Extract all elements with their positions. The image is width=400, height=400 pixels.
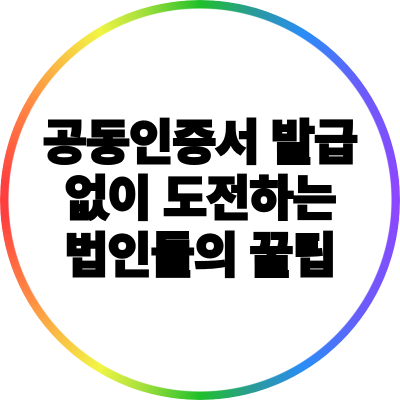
- title line 3: 법인들의 꿀팁: [64, 230, 336, 283]
- title line 1: 공동인증서 발급: [43, 117, 357, 170]
- title line 2: 없이 도전하는: [64, 173, 336, 226]
